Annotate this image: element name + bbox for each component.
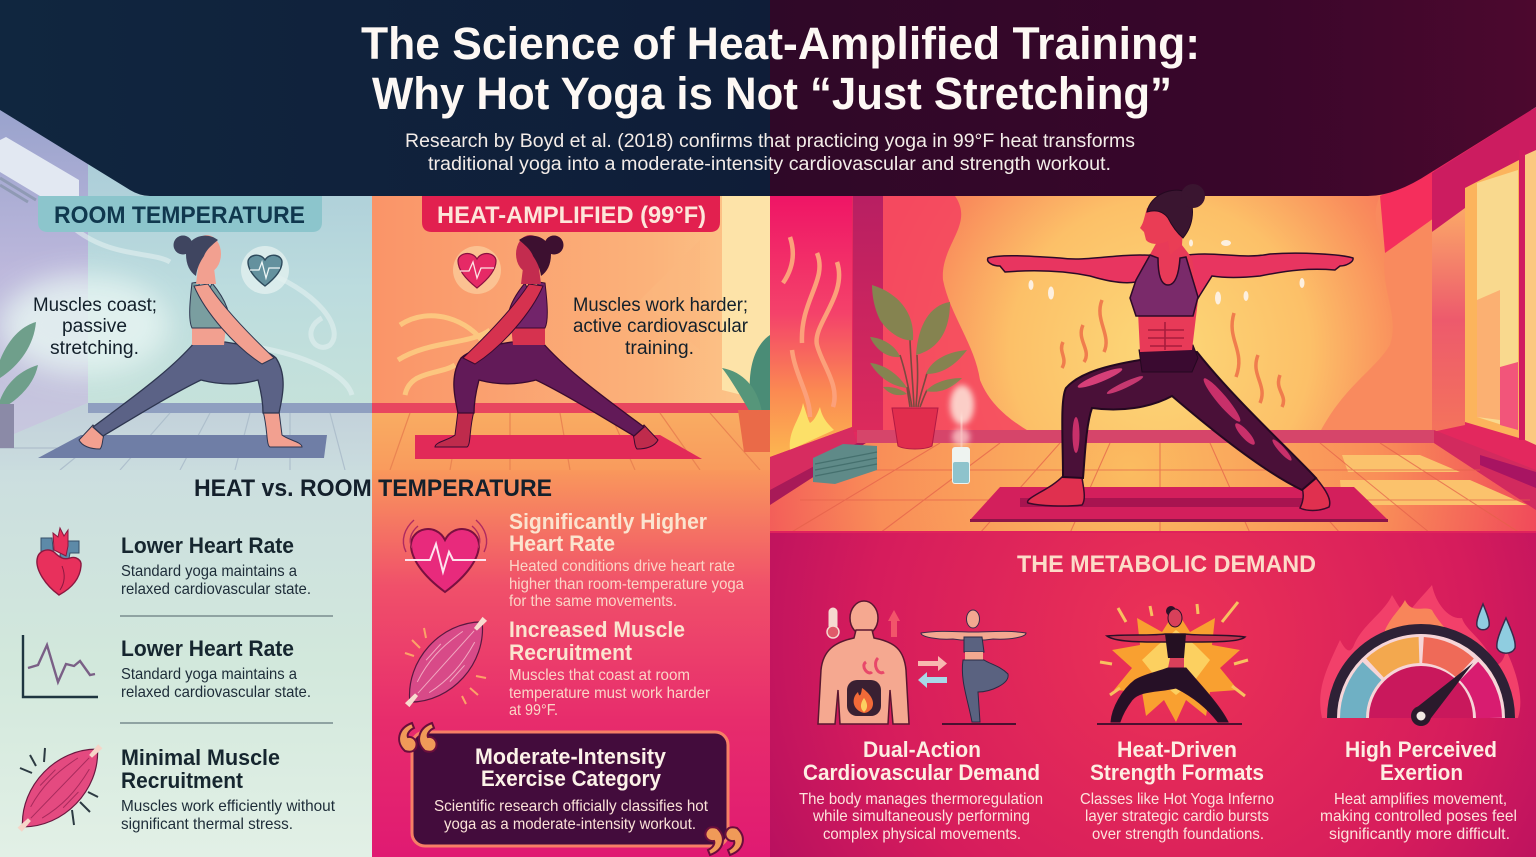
heading: the metabolic demand: THE METABOLIC DEMAND [1017, 551, 1316, 578]
head [521, 268, 541, 284]
item: increased muscle recruitment: temperature must work harder [509, 685, 711, 702]
badge: heat-amplified: HEAT-AMPLIFIED (99°F) [437, 202, 706, 229]
item: minimal muscle recruitment [4, 731, 336, 845]
icon: water drops [1477, 604, 1515, 653]
item: increased muscle recruitment: at 99°F. [509, 702, 558, 719]
column: high perceived exertion: making controlled poses feel [1320, 808, 1517, 825]
leggings [454, 342, 644, 436]
text: room caption: passive [62, 316, 127, 337]
icon: closing quote [705, 827, 743, 855]
column: heat-driven strength formats [1080, 602, 1274, 843]
column: dual-action cardiovascular demand: The body manages thermoregulation [799, 791, 1043, 808]
callout: moderate-intensity exercise category: Exercise Category [481, 766, 662, 791]
panel: metabolic demand background [770, 533, 1536, 857]
column: high perceived exertion: Exertion [1380, 760, 1463, 785]
item: significantly higher heart rate: for the same movements. [509, 593, 677, 610]
arm [463, 284, 543, 364]
text: heat caption [573, 295, 749, 359]
illustration: heat-amplified yoga figure [415, 235, 702, 459]
column: high perceived exertion [1320, 585, 1520, 843]
icon: glowing heart [403, 520, 487, 592]
callout: moderate-intensity exercise category: Scientific research officially classifies hot [434, 798, 709, 815]
panel: room temperature background [0, 100, 372, 857]
icon: potted plant [870, 285, 967, 449]
column: dual-action cardiovascular demand [799, 601, 1043, 843]
item: increased muscle recruitment: Recruitment [509, 640, 632, 665]
item: significantly higher heart rate: Heart Rate [509, 531, 615, 556]
yoga mat [415, 435, 702, 459]
torso [192, 326, 226, 345]
panel: hot room scene [770, 107, 1536, 535]
column: dual-action cardiovascular demand: complex physical movements. [823, 826, 1021, 843]
icon: needle [1411, 663, 1473, 726]
item: lower heart rate 1: relaxed cardiovascular state. [121, 581, 311, 598]
column: dual-action cardiovascular demand: while simultaneously performing [812, 808, 1030, 825]
feet [1028, 476, 1084, 506]
icon: towels [813, 444, 877, 484]
item: minimal muscle recruitment: Recruitment [121, 768, 243, 793]
item: increased muscle recruitment [390, 603, 711, 721]
icon: thermometer [827, 608, 839, 638]
callout: moderate-intensity exercise category: Moderate-Intensity [475, 744, 667, 769]
head [196, 268, 216, 284]
text: heat caption: training. [625, 338, 694, 359]
icon: flames behind gauge [1320, 585, 1520, 718]
torso skin and abs [1132, 240, 1198, 352]
right pillar and window [1432, 107, 1536, 232]
panel: heat-amplified background [372, 100, 770, 857]
leggings [93, 342, 283, 436]
feet [435, 411, 474, 447]
item: lower heart rate 1: Standard yoga maintains a [121, 563, 297, 580]
header banner [0, 0, 1536, 196]
subtitle: Research by Boyd et al. (2018) confirms that practicing yoga in 99°F heat transforms [405, 131, 1135, 152]
arm [194, 284, 274, 364]
column: heat-driven strength formats: layer strategic cardio bursts [1085, 808, 1269, 825]
column: heat-driven strength formats: Classes like Hot Yoga Inferno [1080, 791, 1274, 808]
left window with flames [770, 196, 852, 457]
text: heat caption: Muscles work harder; [573, 295, 748, 316]
icon: teal heart [241, 246, 289, 294]
icon: water bottle with steam [950, 385, 974, 484]
column: heat-driven strength formats: over strength foundations. [1092, 826, 1264, 843]
sports bra [1130, 255, 1198, 316]
icon: anatomical heart [37, 528, 81, 595]
arms [988, 255, 1160, 283]
column: heat-driven strength formats: Strength Formats [1090, 760, 1264, 785]
callout: moderate-intensity exercise category [399, 723, 743, 855]
feet [263, 411, 302, 447]
icon: warrior pose with burst [1097, 602, 1248, 725]
leggings [1062, 352, 1316, 490]
floor [770, 443, 1536, 533]
icon: opening quote [399, 723, 437, 752]
icon: muscle [4, 731, 116, 845]
item: lower heart rate 2: Standard yoga maintains a [121, 666, 297, 683]
baseboard [857, 430, 1434, 443]
column: high perceived exertion: significantly more difficult. [1329, 826, 1510, 843]
title: Why Hot Yoga is Not “Just Stretching” [372, 68, 1172, 119]
text: room caption: stretching. [50, 338, 139, 359]
icon: air conditioner [0, 137, 79, 202]
column: high perceived exertion: High Perceived [1345, 737, 1497, 762]
text: heat caption: active cardiovascular [573, 316, 749, 337]
item: lower heart rate 2: Lower Heart Rate [121, 636, 294, 661]
heading: heat vs room temperature: HEAT vs. ROOM TEMPERATURE [194, 475, 552, 502]
arrow: exchange left [918, 672, 947, 688]
arrow: up [888, 610, 900, 637]
illustration: room temperature yoga figure [38, 235, 327, 458]
icon: plant middle [722, 335, 770, 452]
waistband [1139, 345, 1198, 372]
yoga mat [38, 435, 327, 458]
column: dual-action cardiovascular demand: Dual-Action [863, 737, 981, 762]
icon: glowing muscle [390, 603, 502, 721]
column: high perceived exertion: Heat amplifies movement, [1334, 791, 1507, 808]
torso [511, 326, 545, 345]
column: dual-action cardiovascular demand: Cardiovascular Demand [803, 760, 1040, 785]
item: significantly higher heart rate: Significantly Higher [509, 509, 707, 534]
text: room caption [33, 295, 157, 359]
item: significantly higher heart rate [403, 509, 744, 610]
icon: plant left [0, 322, 38, 448]
illustration: main warrior pose figure [970, 184, 1388, 522]
callout: moderate-intensity exercise category: yoga as a moderate-intensity workout. [444, 816, 696, 833]
icon: body with internal flame [818, 601, 909, 724]
subtitle [405, 131, 1135, 175]
item: lower heart rate 1 [37, 528, 311, 598]
item: lower heart rate 2 [23, 635, 311, 701]
arrow: exchange right [918, 656, 947, 671]
head and hair [1140, 198, 1184, 255]
item: minimal muscle recruitment: Minimal Muscle [121, 745, 280, 770]
icon: tree pose figure [921, 610, 1026, 725]
icon: pink heart [453, 246, 501, 294]
icon: line chart [23, 635, 98, 697]
badge: heat-amplified [422, 196, 720, 232]
title [361, 18, 1200, 119]
item: increased muscle recruitment: Muscles that coast at room [509, 667, 690, 684]
heat squiggles [1062, 300, 1284, 407]
column: heat-driven strength formats: Heat-Driven [1117, 737, 1237, 762]
sweat drops [1028, 240, 1304, 304]
badge: room temperature: ROOM TEMPERATURE [54, 202, 305, 229]
subtitle: traditional yoga into a moderate-intensity cardiovascular and strength workout. [428, 154, 1111, 175]
item: lower heart rate 2: relaxed cardiovascular state. [121, 684, 311, 701]
back wall [882, 170, 1434, 432]
item: increased muscle recruitment: Increased Muscle [509, 617, 685, 642]
text: room caption: Muscles coast; [33, 295, 157, 316]
icon: exertion gauge [1333, 630, 1509, 718]
title: The Science of Heat-Amplified Training: [361, 18, 1200, 69]
item: minimal muscle recruitment: Muscles work efficiently without [121, 798, 336, 815]
item: minimal muscle recruitment: significant thermal stress. [121, 816, 293, 833]
item: significantly higher heart rate: higher than room-temperature yoga [509, 576, 744, 593]
item: significantly higher heart rate: Heated conditions drive heart rate [509, 558, 735, 575]
item: lower heart rate 1: Lower Heart Rate [121, 533, 294, 558]
badge: room temperature [38, 196, 322, 232]
yoga mat [970, 487, 1388, 522]
